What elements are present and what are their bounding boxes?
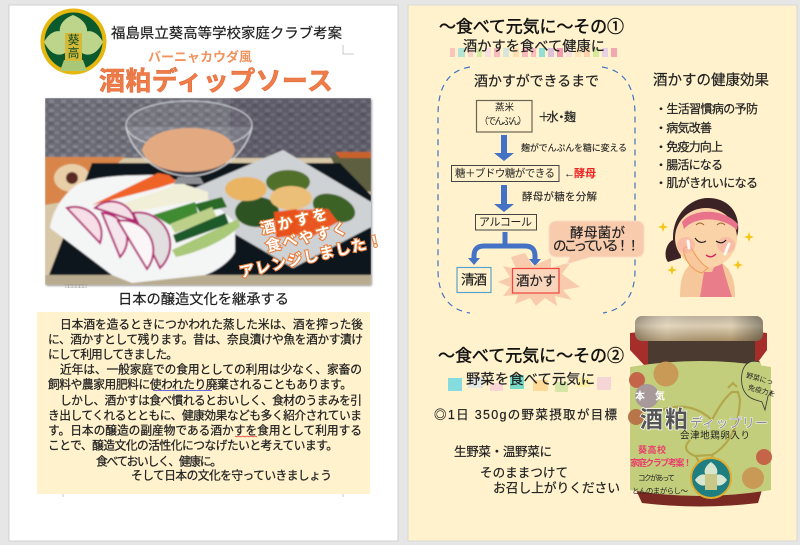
panel: body text: 近年は、一般家庭での食用としての利用は少なく、家畜の (60, 362, 362, 376)
panel: body text: 日本酒を造るときにつかわれた蒸した米は、酒を搾った後 (60, 318, 363, 332)
photo: vegetables and dip (45, 98, 371, 285)
label: water and koji: ＋水・麹 (538, 109, 576, 124)
icon: school crest: 高 (67, 46, 80, 60)
photo: product jar: 葵高校 (638, 444, 666, 455)
panel: left page (9, 5, 398, 541)
heading: health effects: 酒かすの健康効果 (653, 72, 769, 89)
photo: product jar: とんのまがらし～ (632, 486, 688, 496)
subheading: section one: 酒かすを食べて健康に (463, 38, 605, 55)
list: health effects: ・腸活になる (655, 158, 723, 172)
icon: school crest (40, 8, 106, 74)
flow step: alcohol: アルコール (479, 216, 532, 228)
heading: section one: ～食べて元気に～その① (439, 18, 624, 36)
outline: dashed process frame (438, 67, 635, 313)
heading: process: 酒かすができるまで (474, 73, 599, 89)
panel: body text: に、酒かすとして残ります。昔は、奈良漬けや魚を酒かす漬け (48, 332, 363, 346)
photo: product jar: 家庭クラブ考案！ (630, 457, 692, 468)
panel: body text: そして日本の文化を守っていきましょう (131, 468, 332, 482)
panel: body text: 飼料や農家用肥料に使われたり廃棄されることもあります。 (48, 378, 352, 392)
heading: brewing culture: 日本の醸造文化を継承する (118, 291, 289, 308)
photo caption: handwritten overlay: 酒かすを (259, 206, 329, 238)
text: serving suggestion: 生野菜・温野菜に (454, 445, 552, 459)
icon: school crest: 葵 (67, 33, 80, 47)
label: yeast decomposes sugar: 酵母が糖を分解 (522, 190, 598, 203)
list: health effects (655, 101, 758, 190)
list: health effects: ・生活習慣病の予防 (655, 101, 758, 116)
label: yeast: 酵母 (574, 166, 596, 180)
heading: subtitle: バーニャカウダ風 (148, 50, 252, 64)
subheading: section two: 野菜を食べて元気に (466, 371, 595, 388)
heading: school credit: 福島県立葵高等学校家庭クラブ考案 (111, 24, 342, 42)
panel: body text: き出してくれるとともに、健康効果なども多く紹介されていま (48, 408, 362, 422)
arrow: down 2 (494, 185, 514, 212)
subheading: section two (448, 371, 611, 392)
editing marks below photo: □□□□□□ (65, 284, 87, 290)
text: serving suggestion (454, 445, 620, 496)
flow step: sugar: 糖＋ブドウ糖ができる (455, 166, 555, 180)
arrow: down 1 (494, 135, 514, 161)
panel: right page (408, 5, 797, 541)
heading: section two: ～食べて元気に～その② (438, 346, 624, 366)
list: health effects: ・免疫力向上 (655, 139, 723, 154)
panel: body text: にして利用してきました。 (48, 348, 178, 362)
text: serving suggestion: お召し上がりください (493, 480, 620, 496)
panel: body text (37, 312, 370, 494)
text: vegetable goal: ◎1日 350gの野菜摂取が目標 (434, 407, 617, 422)
panel: body text: しかし、酒かすは食べ慣れるとおいしく、食材のうまみを引 (60, 394, 362, 408)
flow step: sugar (452, 166, 559, 182)
list: health effects: ・肌がきれいになる (655, 175, 758, 190)
photo caption: handwritten overlay: 食べやすく (264, 219, 349, 256)
panel: body text: す。日本の醸造の副産物である酒かすを食用として利用する (48, 424, 362, 438)
panel: body text: 食べておいしく、健康に。 (96, 454, 222, 468)
callout: yeast remains: 酵母菌が (570, 226, 626, 240)
photo: product jar: 会津地鶏卵入り (680, 430, 750, 442)
flow step: alcohol (476, 214, 536, 230)
flow result: sake lees with burst: 酒かす (516, 274, 556, 288)
photo: product jar (628, 316, 776, 506)
flow step: steamed rice: 蒸米 (495, 102, 514, 114)
photo: product jar: 野菜にっ (745, 371, 774, 387)
heading: main title: 酒粕ディップソース (99, 66, 333, 96)
photo: product jar: 免疫力を (747, 383, 776, 399)
callout: yeast remains (549, 221, 644, 264)
label: yeast (564, 166, 596, 180)
panel: body text: ことで、醸造文化の活性化につなげたいと考えています。 (48, 438, 338, 452)
flow result: sake lees with burst (498, 253, 580, 306)
photo: product jar: コクがあって (638, 472, 675, 482)
flow step: steamed rice: （でんぷん） (479, 116, 527, 128)
callout: yeast remains: のこっている！！ (553, 238, 640, 254)
flow result: sake: 清酒 (461, 272, 487, 288)
label: koji conversion: 麹がでんぷんを糖に変える (521, 142, 627, 153)
photo caption: handwritten overlay: アレンジしました！ (238, 232, 384, 282)
label: yeast: ← (564, 168, 575, 180)
flow step: steamed rice (476, 100, 532, 132)
photo: product jar: ディップリー (690, 416, 768, 430)
photo: product jar: 酒粕 (640, 406, 688, 432)
photo: product jar: 本気 (635, 390, 665, 402)
text: serving suggestion: そのままつけて (480, 466, 568, 480)
flow result: sake (457, 268, 491, 292)
list: health effects: ・病気改善 (655, 120, 712, 135)
photo caption: handwritten overlay (238, 206, 384, 282)
icon: woman illustration (658, 198, 754, 297)
arrow: branch (468, 232, 541, 266)
